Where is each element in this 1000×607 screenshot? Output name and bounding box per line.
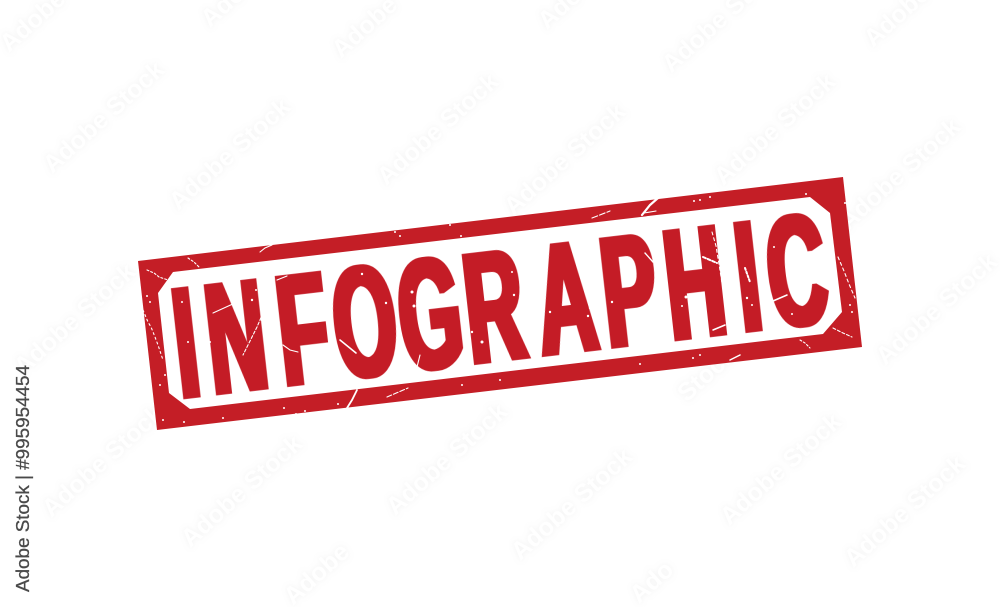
watermark pattern: Adobe Stock [834, 112, 966, 236]
watermark pattern: Adobe Stock [709, 67, 841, 191]
watermark pattern: Adobe Stock [499, 97, 631, 221]
watermark pattern: Adobe Stock [372, 67, 504, 191]
watermark pattern: Adobe Stock [164, 92, 296, 216]
stamp [138, 177, 862, 432]
watermark pattern: Adobe Stock [871, 247, 1000, 371]
watermark pattern: Adobe Stock [176, 429, 308, 553]
stamp inner panel [158, 197, 842, 409]
grunge scratches [143, 198, 855, 408]
stamp word: INFOGRAPHIC [165, 181, 835, 432]
watermark pattern: Adobe Stock [715, 407, 847, 531]
grunge specks [146, 185, 853, 423]
side credit text: Adobe Stock | #995954454 [13, 365, 33, 592]
watermark pattern: Adobe Stock [9, 257, 141, 381]
watermark pattern: Adobe Stock [37, 399, 169, 523]
watermark pattern: Adobe Stock [381, 397, 513, 521]
watermark pattern: Adobe Stock [506, 442, 638, 566]
stamp frame [138, 177, 862, 430]
watermark pattern: Stock [672, 341, 741, 407]
watermark pattern: Adobe Stock [38, 55, 170, 179]
watermark pattern: Adobe Stock [839, 449, 971, 573]
